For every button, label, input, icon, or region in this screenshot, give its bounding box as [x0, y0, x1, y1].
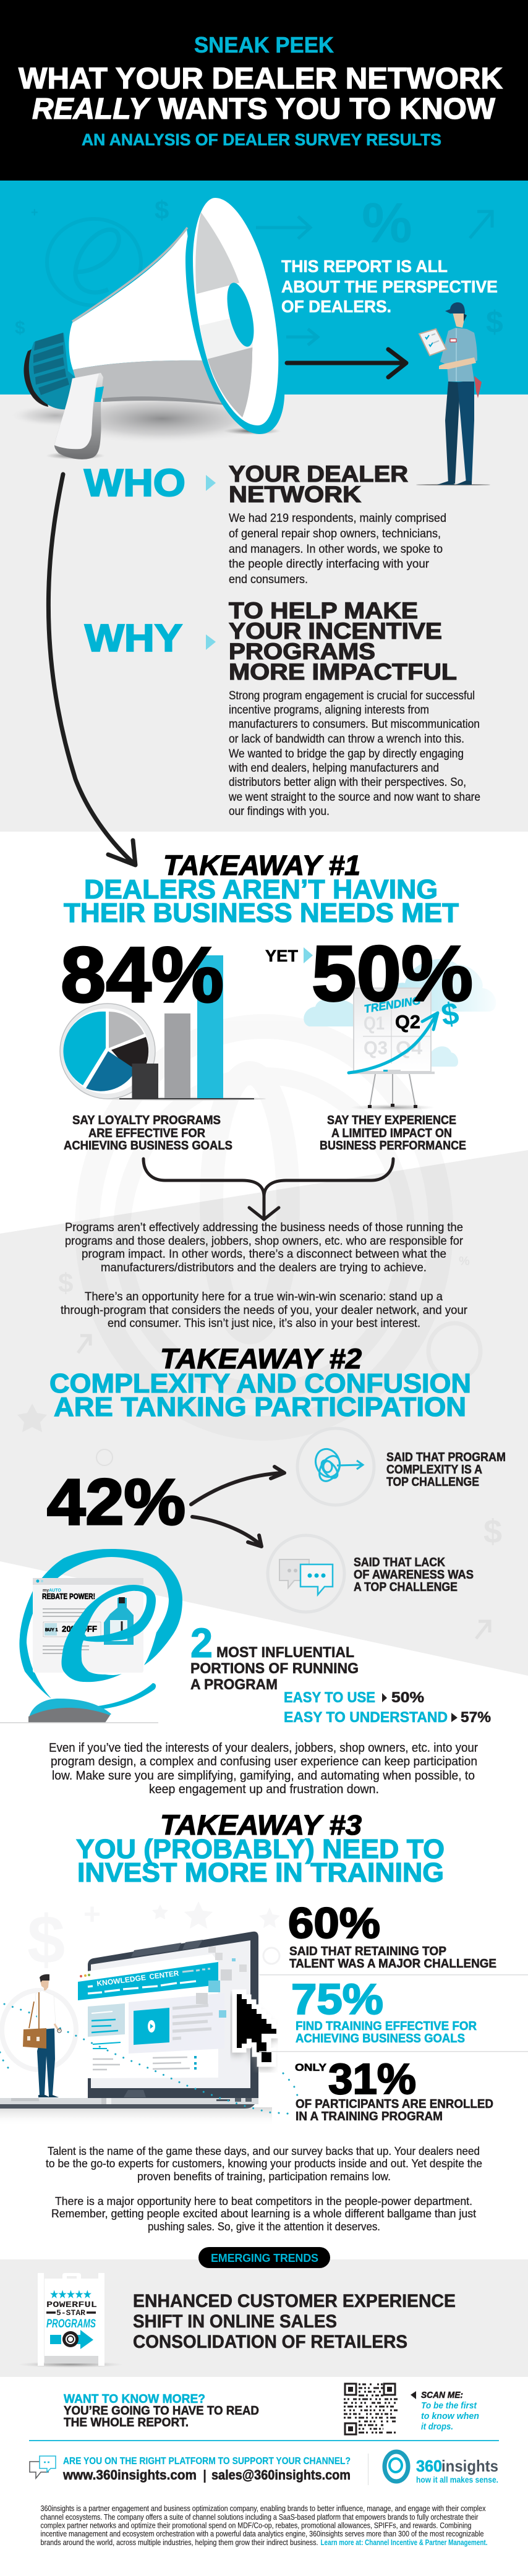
panel: intro with megaphone: +: [31, 206, 38, 220]
decoration: dotted path: [0, 2004, 300, 2114]
illustration: five-star sign: POWERFUL: [46, 2300, 97, 2310]
text block: want to know more: [64, 2392, 259, 2429]
heading: takeaway 1: [64, 850, 459, 928]
panel: call to action: [29, 2382, 499, 2441]
text block: 2 most influential: 2: [190, 1620, 213, 1666]
icon: pixel cursor: [234, 1994, 276, 2066]
text block: platform question: ARE YOU ON THE RIGHT PLATFORM TO SUPPORT YOUR CHANNEL?: [63, 2456, 351, 2467]
stat: 60 percent: [288, 1899, 496, 1971]
callout: report perspective: ABOUT THE PERSPECTIVE: [281, 277, 498, 296]
illustration: at-sign with rebate window and mouse: 20% OFF: [62, 1624, 97, 1634]
illustration: flip chart trending: Q4: [396, 1037, 423, 1059]
heading: takeaway 3: YOU (PROBABLY) NEED TO: [76, 1834, 445, 1864]
arrow: to mechanic: [287, 349, 406, 377]
heading: takeaway 3: INVEST MORE IN TRAINING: [77, 1857, 444, 1888]
eyebrow: sneak peek: SNEAK PEEK: [194, 32, 334, 58]
text block: who body: the people directly interfacing with your: [229, 558, 430, 571]
title: [19, 62, 503, 126]
text block: scan me: [411, 2390, 479, 2432]
section: who: WHO: [84, 462, 185, 505]
stat: 75 percent: 75%: [291, 1975, 383, 2023]
text block: lack of awareness: [354, 1556, 474, 1594]
caption: loyalty programs: ACHIEVING BUSINESS GOALS: [64, 1139, 232, 1153]
illustration: at-sign with rebate window and mouse: REBATE POWER!: [42, 1592, 95, 1601]
panel: emerging trends: [0, 2247, 528, 2377]
heading: takeaway 2: COMPLEXITY AND CONFUSION: [49, 1368, 471, 1399]
panel: takeaway 1 and 2 background: $: [483, 1513, 502, 1550]
illustration: man with briefcase: [23, 1974, 61, 2097]
text block: takeaway 1 body: end consumer. This isn’t just nice, it’s also in your best interest.: [108, 1316, 420, 1330]
text block: takeaway 1 body: through-program that considers the needs of you, your dealer network, and your: [61, 1303, 467, 1317]
text block: 2 most influential: A PROGRAM: [190, 1676, 278, 1693]
title: WANTS YOU TO KNOW: [158, 93, 496, 126]
panel: contact footer: [29, 2452, 499, 2485]
text block: lack of awareness: SAID THAT LACK: [354, 1556, 445, 1569]
stat: easy to understand: 57%: [461, 1709, 491, 1726]
text block: program complexity: TOP CHALLENGE: [386, 1475, 479, 1489]
panel: intro with megaphone: $: [15, 318, 25, 338]
text block: takeaway 3 body: Talent is the name of the game these days, and our survey backs that up. Your dealers need: [48, 2144, 480, 2157]
panel: intro with megaphone: $: [155, 195, 169, 224]
section: who: [84, 461, 446, 586]
illustration: at-sign with rebate window and mouse: BUY 1: [45, 1628, 58, 1632]
logo: 360insights: how it all makes sense.: [416, 2475, 498, 2484]
text block: company boilerplate: Learn more at: Channel Incentive & Partner Management.: [320, 2538, 487, 2547]
heading: takeaway 2: TAKEAWAY #2: [160, 1343, 362, 1375]
text block: why body: our findings with you.: [229, 805, 330, 818]
section: who: NETWORK: [229, 482, 361, 507]
heading: takeaway 2: [49, 1343, 471, 1422]
illustration: laptop knowledge center: [0, 1932, 272, 2126]
label: yet: [265, 947, 313, 965]
title: WHAT YOUR DEALER NETWORK: [19, 62, 503, 95]
text block: 2 most influential: MOST INFLUENTIAL: [216, 1644, 354, 1661]
arrow: long curved arrow to takeaway 1: [48, 474, 135, 865]
text block: takeaway 3 body: Remember, getting people excited about learning is a whole different ballgame than just: [51, 2207, 476, 2220]
logo: 360insights: 360: [416, 2457, 442, 2475]
panel: takeaway 1: [60, 850, 496, 1330]
panel: intro with megaphone: %: [362, 192, 412, 255]
contact links: www.360insights.com: [62, 2467, 197, 2483]
panel: takeaway 3: +: [83, 1898, 101, 1931]
heading: takeaway 1: THEIR BUSINESS NEEDS MET: [64, 898, 459, 928]
stat: 75 percent: FIND TRAINING EFFECTIVE FOR: [296, 2019, 477, 2033]
heading: takeaway 3: TAKEAWAY #3: [160, 1809, 362, 1841]
illustration: five-star sign: [18, 2273, 123, 2368]
illustration: five-star sign: 5-STAR: [56, 2308, 85, 2318]
text block: who body: end consumers.: [229, 573, 308, 586]
contact links: sales@360insights.com: [211, 2467, 351, 2483]
text block: takeaway 2 body: program design, a complex and confusing user experience can keep participation: [51, 1754, 477, 1768]
caption: limited impact: BUSINESS PERFORMANCE: [320, 1139, 466, 1153]
heading: takeaway 1: TAKEAWAY #1: [163, 850, 360, 881]
panel: takeaway 1 and 2 background: [0, 1026, 528, 1676]
text block: why body: or lack of bandwidth can throw a wrench into this.: [229, 733, 464, 746]
text block: who body: and managers. In other words, we spoke to: [229, 543, 443, 556]
panel: intro with megaphone: $: [486, 305, 503, 339]
text block: why body: incentive programs, aligning interests from: [229, 704, 429, 717]
text block: why body: with end dealers, helping manufacturers and: [228, 762, 439, 775]
stat: 75 percent: ACHIEVING BUSINESS GOALS: [296, 2032, 465, 2045]
illustration: at-sign with rebate window and mouse: myAUTO: [43, 1589, 61, 1593]
text block: trends list: [133, 2291, 456, 2352]
text block: lack of awareness: OF AWARENESS WAS: [354, 1568, 474, 1582]
text block: takeaway 1 body: [61, 1221, 467, 1330]
icon: complexity scribble: [297, 1428, 374, 1505]
section: why: WHY: [85, 617, 182, 660]
callout: report perspective: THIS REPORT IS ALL: [281, 257, 448, 276]
text block: scan me: SCAN ME:: [421, 2390, 463, 2400]
contact links: [62, 2467, 351, 2483]
caption: loyalty programs: ARE EFFECTIVE FOR: [88, 1127, 206, 1140]
caption: loyalty programs: SAY LOYALTY PROGRAMS: [72, 1114, 221, 1127]
badge: emerging trends: [198, 2247, 330, 2268]
callout: report perspective: OF DEALERS.: [281, 297, 391, 316]
icon: chat: [30, 2456, 56, 2478]
text block: who body: We had 219 respondents, mainly comprised: [229, 512, 446, 525]
text block: why body: [228, 689, 480, 818]
illustration: five-star sign: PROGRAMS: [46, 2318, 96, 2331]
icon: QR code: [344, 2382, 398, 2436]
text block: trends list: ENHANCED CUSTOMER EXPERIENCE: [133, 2291, 456, 2311]
illustration: flip chart trending: TRENDING: [363, 994, 421, 1015]
stat: easy to understand: EASY TO UNDERSTAND: [284, 1709, 448, 1726]
icon: chat bubbles: [268, 1535, 344, 1612]
illustration: laptop knowledge center: CENTER: [149, 1969, 179, 1981]
text block: program complexity: COMPLEXITY IS A: [386, 1463, 482, 1477]
text block: scan me: To be the first: [421, 2400, 477, 2411]
subtitle: AN ANALYSIS OF DEALER SURVEY RESULTS: [82, 130, 441, 149]
illustration: flip chart trending: $: [439, 996, 461, 1033]
caption: loyalty programs: [64, 1114, 232, 1153]
stat: 60 percent: TALENT WAS A MAJOR CHALLENGE: [289, 1957, 496, 1971]
text block: takeaway 3 body: pushing sales. So, give it the attention it deserves.: [148, 2220, 380, 2233]
heading: takeaway 2: ARE TANKING PARTICIPATION: [54, 1392, 466, 1422]
badge: emerging trends: EMERGING TRENDS: [211, 2252, 318, 2264]
text block: scan me: it drops.: [421, 2421, 453, 2432]
illustration: five-star sign: ★★★★★: [50, 2290, 92, 2300]
title: REALLY: [32, 93, 151, 126]
panel: header: [0, 0, 528, 181]
text block: takeaway 3 body: There is a major opportunity here to beat competitors in the people-power department.: [55, 2194, 472, 2207]
panel: intro with megaphone: [0, 181, 528, 865]
text block: want to know more: THE WHOLE REPORT.: [64, 2416, 189, 2429]
text block: why body: manufacturers to consumers. But miscommunication: [229, 718, 480, 731]
panel: takeaway 2: [0, 1343, 507, 1801]
arrow: to complexity: [191, 1467, 284, 1504]
text block: takeaway 1 body: program impact. In other words, there’s a disconnect between what the: [82, 1247, 446, 1261]
stat: 42 percent: 42%: [47, 1466, 185, 1538]
text block: why body: we went straight to the source and now want to share: [228, 791, 480, 804]
illustration: flip chart trending: Q2: [395, 1011, 420, 1033]
section: why: TO HELP MAKE: [229, 598, 418, 623]
illustration: at-sign with rebate window and mouse: [0, 1549, 182, 1723]
text block: who body: [229, 512, 446, 586]
text block: takeaway 1 body: There’s an opportunity here for a true win-win-win scenario: stand up a: [85, 1290, 443, 1303]
stat: 84 percent: 84%: [61, 931, 224, 1018]
stat: 60 percent: SAID THAT RETAINING TOP: [289, 1945, 446, 1958]
text block: takeaway 2 body: keep engagement up and frustration down.: [149, 1782, 379, 1796]
text block: takeaway 2 body: low. Make sure you are simplifying, gamifying, and automating when possible, to: [52, 1768, 475, 1783]
text block: takeaway 2 body: Even if you’ve tied the interests of your dealers, jobbers, shop owners, etc. into your: [49, 1741, 478, 1755]
stat: easy to use: 50%: [391, 1689, 424, 1706]
text block: want to know more: YOU’RE GOING TO HAVE TO READ: [64, 2404, 259, 2418]
text block: why body: Strong program engagement is crucial for successful: [229, 689, 475, 702]
stat: easy to use: EASY TO USE: [284, 1689, 375, 1706]
section: who: YOUR DEALER: [229, 461, 408, 487]
text block: takeaway 1 body: programs and those dealers, jobbers, shop owners, etc. who are responsible for: [65, 1234, 463, 1248]
text block: takeaway 3 body: [46, 2144, 482, 2233]
panel: takeaway 1 and 2 background: %: [459, 1255, 470, 1268]
logo: 360insights: insights: [441, 2457, 498, 2475]
text block: why body: We wanted to bridge the gap by directly engaging: [229, 748, 464, 761]
stat: 31 percent: 31%: [328, 2055, 416, 2103]
text block: company boilerplate: brands around the world, across multiple industries, helping them grow their indirect business.: [41, 2538, 318, 2547]
icon: mechanic with clipboard: [416, 302, 490, 485]
text block: who body: of general repair shop owners, technicians,: [229, 527, 441, 540]
heading: takeaway 3: [76, 1809, 445, 1888]
arrow: to awareness: [192, 1517, 262, 1546]
stat: 31 percent: ONLY: [295, 2062, 327, 2073]
callout: report perspective: [281, 257, 498, 316]
text block: want to know more: WANT TO KNOW MORE?: [64, 2392, 205, 2406]
stat: 75 percent: [291, 1975, 477, 2045]
text block: trends list: CONSOLIDATION OF RETAILERS: [133, 2332, 407, 2352]
text block: program complexity: SAID THAT PROGRAM: [386, 1451, 506, 1464]
text block: company boilerplate: [41, 2504, 487, 2547]
section: why: YOUR INCENTIVE: [229, 618, 442, 644]
icon: megaphone: [9, 198, 284, 459]
logo: 360insights: [385, 2452, 498, 2484]
text block: takeaway 2 body: [49, 1741, 478, 1796]
heading: takeaway 1: DEALERS AREN’T HAVING: [84, 874, 438, 905]
panel: takeaway 1 and 2 background: $: [58, 1268, 73, 1299]
label: yet: YET: [265, 947, 299, 965]
chart: pie and bars: [60, 955, 266, 1101]
text block: takeaway 3 body: to be the go-to experts for customers, knowing your products inside and out. Yet despite the: [46, 2157, 482, 2170]
caption: limited impact: SAY THEY EXPERIENCE: [327, 1114, 456, 1127]
section: why: MORE IMPACTFUL: [229, 659, 457, 685]
section: why: PROGRAMS: [229, 639, 375, 664]
stat: 31 percent: OF PARTICIPANTS ARE ENROLLED: [296, 2097, 493, 2111]
panel: takeaway 3: $: [27, 1902, 65, 1978]
text block: takeaway 1 body: manufacturers/distributors and the dealers are trying to achieve.: [101, 1261, 427, 1274]
stat: 31 percent: [295, 2055, 493, 2123]
illustration: flip chart trending: [304, 959, 496, 1111]
caption: limited impact: [320, 1114, 466, 1153]
illustration: laptop knowledge center: KNOWLEDGE: [96, 1973, 147, 1988]
text block: 2 most influential: [190, 1620, 359, 1693]
stat: 60 percent: 60%: [288, 1899, 380, 1947]
text block: why body: distributors better align with their perspectives. So,: [229, 776, 466, 789]
arrow: brace joining stats: [143, 1159, 393, 1219]
illustration: flip chart trending: Q3: [364, 1037, 388, 1059]
contact links: |: [203, 2467, 207, 2483]
text block: 2 most influential: PORTIONS OF RUNNING: [190, 1660, 359, 1677]
illustration: flip chart trending: Q1: [364, 1012, 385, 1034]
stat: 31 percent: IN A TRAINING PROGRAM: [296, 2110, 443, 2123]
caption: limited impact: A LIMITED IMPACT ON: [331, 1127, 452, 1140]
section: why: [85, 598, 480, 818]
text block: lack of awareness: A TOP CHALLENGE: [354, 1580, 458, 1594]
panel: takeaway 3: [0, 1809, 528, 2233]
text block: scan me: to know when: [421, 2411, 479, 2421]
text block: trends list: SHIFT IN ONLINE SALES: [133, 2311, 337, 2332]
text block: program complexity: [386, 1451, 506, 1489]
text block: takeaway 3 body: proven benefits of training, participation remains low.: [137, 2170, 391, 2183]
text block: takeaway 1 body: Programs aren’t effectively addressing the business needs of those running the: [65, 1221, 463, 1234]
stat: 50 percent: 50%: [312, 929, 473, 1017]
